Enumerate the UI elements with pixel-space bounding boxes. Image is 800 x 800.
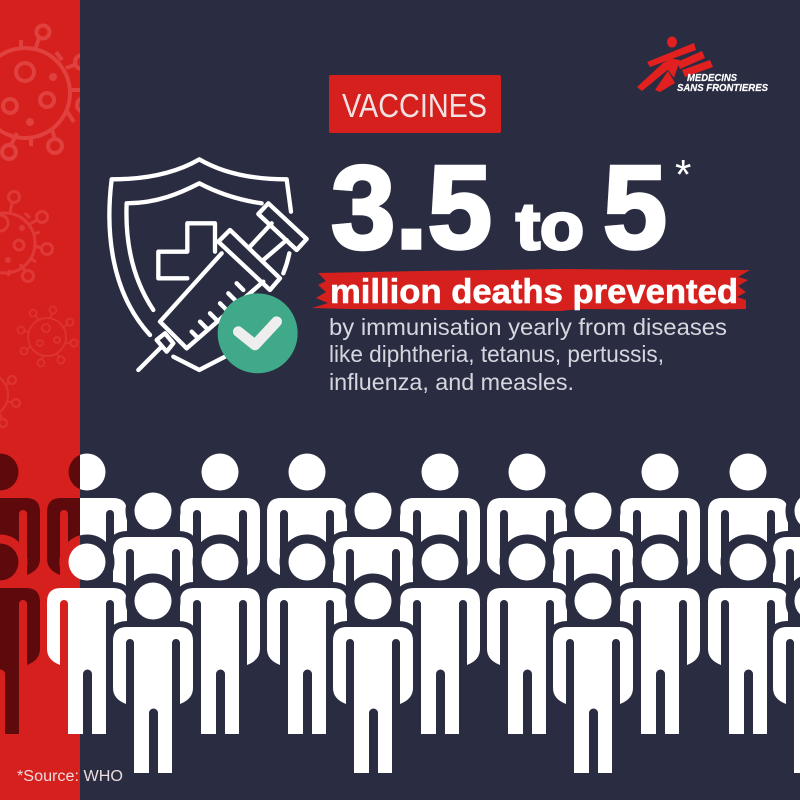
vaccines tag: VACCINES xyxy=(342,87,487,124)
crowd: dark figures on red band xyxy=(0,454,80,734)
description text: influenza, and measles. xyxy=(329,369,574,395)
virus: small outline xyxy=(18,306,78,366)
shield inner line xyxy=(126,183,262,310)
logo: MSF: SANS FRONTIERES xyxy=(677,82,768,94)
vaccines tag xyxy=(329,75,501,133)
headline number xyxy=(331,142,667,274)
virus: large xyxy=(0,26,91,159)
brush stroke highlight xyxy=(312,269,750,311)
green check badge xyxy=(218,293,298,373)
description text: like diphtheria, tetanus, pertussis, xyxy=(329,341,664,367)
virus pattern on side band xyxy=(0,24,80,428)
logo figure xyxy=(637,36,713,92)
red side band xyxy=(0,0,80,800)
virus: medium xyxy=(0,192,52,282)
description text xyxy=(329,314,727,395)
source note: *Source: WHO xyxy=(17,768,123,785)
syringe xyxy=(138,203,307,370)
description text: by immunisation yearly from diseases xyxy=(329,314,727,340)
cross xyxy=(158,223,215,278)
highlight text: million deaths prevented xyxy=(330,273,738,311)
headline number: 5 xyxy=(603,142,667,274)
shield outline xyxy=(109,159,291,370)
logo: MSF xyxy=(637,36,768,94)
virus: cropped lower xyxy=(0,373,20,427)
crowd: white figures on navy xyxy=(0,454,800,773)
headline number: to xyxy=(516,189,584,263)
icon: shield with syringe xyxy=(109,159,307,373)
logo wordmark: MEDECINS xyxy=(687,72,737,84)
headline number: 3.5 xyxy=(331,142,492,274)
crowd of people xyxy=(0,454,800,773)
asterisk: * xyxy=(675,151,691,198)
crowd: white figure crossing the band edge xyxy=(47,535,80,734)
